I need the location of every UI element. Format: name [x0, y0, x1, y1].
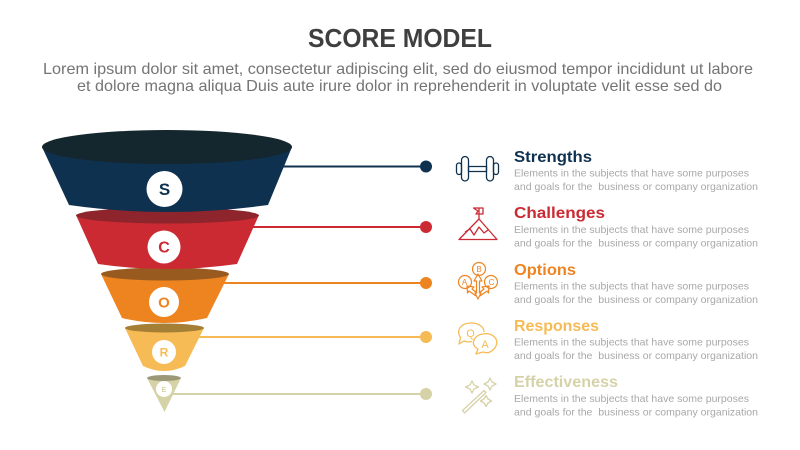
- heading and text: strengths: Strengths: [514, 149, 592, 166]
- icon: options arrows: A: [462, 278, 468, 287]
- heading and text: options: [514, 262, 758, 306]
- heading and text: effectiveness: Elements in the subjects that have some purposes: [514, 393, 749, 405]
- heading and text: effectiveness: Effectiveness: [514, 374, 618, 391]
- funnel layer: strengths: [42, 130, 292, 212]
- icon: speech bubbles: A: [481, 339, 489, 351]
- icon: options arrows: C: [489, 278, 495, 287]
- icon: speech bubbles: Q: [466, 328, 475, 340]
- connector: challenges: [245, 221, 432, 233]
- heading and text: effectiveness: [514, 374, 758, 418]
- funnel layer: strengths: S: [159, 180, 170, 199]
- subtitle text block: et dolore magna aliqua Duis aute irure dolor in reprehenderit in voluptate velit esse sed do: [77, 78, 722, 95]
- heading and text: strengths: Elements in the subjects that have some purposes: [514, 168, 749, 180]
- heading and text: effectiveness: and goals for the business or company organization: [514, 406, 758, 418]
- funnel layer: responses: R: [160, 346, 169, 360]
- funnel layer: options: O: [158, 294, 170, 312]
- heading and text: responses: [514, 318, 758, 362]
- connector: responses: [195, 331, 432, 343]
- heading and text: challenges: and goals for the business or company organization: [514, 238, 758, 250]
- connector: effectiveness: [172, 388, 432, 400]
- funnel layer: challenges: [76, 208, 259, 269]
- connector: strengths: [280, 160, 432, 172]
- heading and text: challenges: Elements in the subjects that have some purposes: [514, 224, 749, 236]
- funnel layer: options: [101, 268, 229, 323]
- icon: mountain flag: [459, 208, 497, 240]
- heading and text: responses: and goals for the business or company organization: [514, 350, 758, 362]
- title: SCORE MODEL: [308, 23, 492, 53]
- heading and text: options: Elements in the subjects that have some purposes: [514, 280, 749, 292]
- funnel layer: challenges: C: [158, 240, 170, 256]
- funnel layer: responses: [125, 324, 204, 371]
- icon: speech bubbles: [459, 323, 497, 354]
- heading and text: responses: Responses: [514, 318, 599, 335]
- funnel layer: effectiveness: [147, 375, 181, 412]
- heading and text: strengths: [514, 149, 758, 193]
- subtitle text block: [43, 61, 753, 95]
- icon: options arrows: [458, 262, 498, 299]
- heading and text: responses: Elements in the subjects that have some purposes: [514, 336, 749, 348]
- connector: options: [220, 277, 432, 289]
- icon: dumbbell: [456, 156, 498, 181]
- heading and text: options: and goals for the business or company organization: [514, 294, 758, 306]
- heading and text: challenges: [514, 205, 758, 250]
- funnel layer: effectiveness: E: [162, 387, 167, 394]
- heading and text: strengths: and goals for the business or company organization: [514, 181, 758, 193]
- heading and text: options: Options: [514, 262, 576, 279]
- icon: options arrows: B: [476, 265, 482, 274]
- heading and text: challenges: Challenges: [514, 205, 605, 222]
- subtitle text block: Lorem ipsum dolor sit amet, consectetur adipiscing elit, sed do eiusmod tempor incididunt ut labore: [43, 61, 753, 78]
- icon: magic wand: [462, 378, 496, 413]
